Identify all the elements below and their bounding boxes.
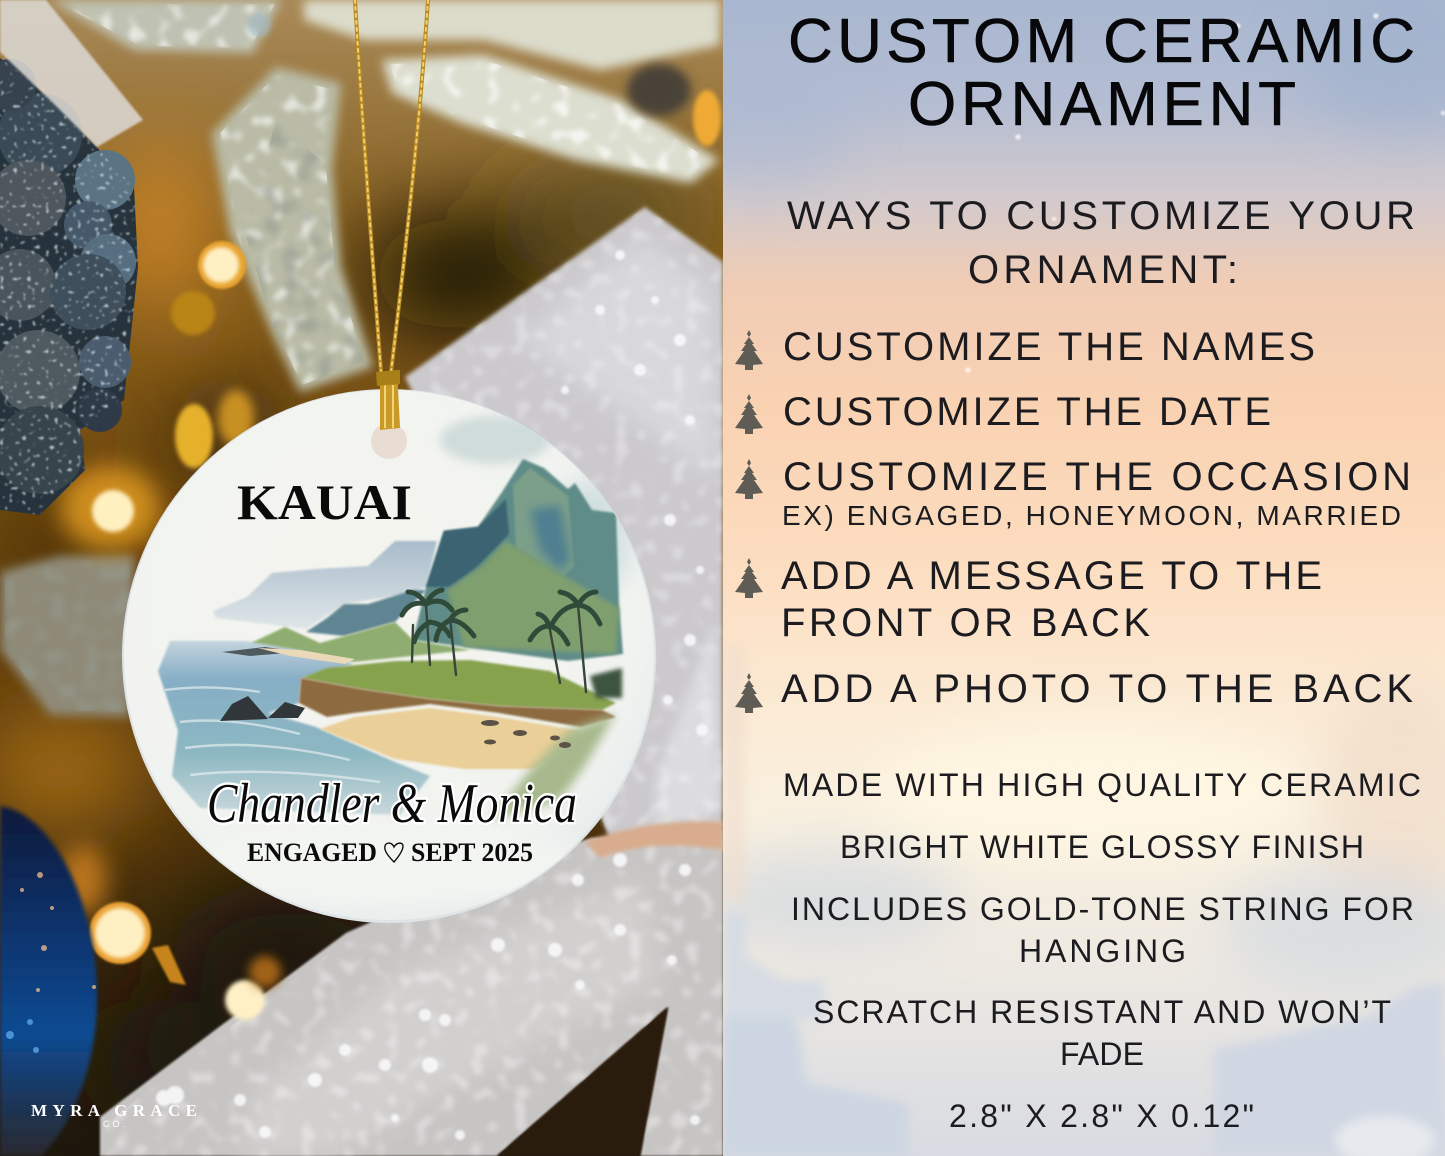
product specs [783, 767, 1421, 1134]
glitter bauble cluster [0, 58, 138, 515]
subheading [787, 201, 1414, 284]
subheading: ORNAMENT: [968, 248, 1238, 292]
gold knot [376, 370, 400, 430]
dark blue glitter bauble [0, 806, 97, 1156]
place name: KAUAI [237, 474, 412, 530]
item: message [735, 558, 1320, 636]
item: occasion: CUSTOMIZE THE OCCASION [783, 455, 1411, 499]
item: occasion: EX) ENGAGED, HONEYMOON, MARRIED [782, 500, 1401, 531]
palm trees [402, 590, 600, 692]
product specs: BRIGHT WHITE GLOSSY FINISH [840, 829, 1364, 865]
product specs: INCLUDES GOLD-TONE STRING FOR [791, 891, 1414, 927]
product specs: SCRATCH RESISTANT AND WON’T [813, 994, 1391, 1030]
product specs: FADE [1060, 1036, 1144, 1072]
panel: product photo [0, 0, 723, 1156]
item: message: ADD A MESSAGE TO THE [781, 554, 1322, 598]
background blur: warm bokeh and dark foliage [0, 140, 700, 1120]
fade behind names [204, 846, 574, 901]
title: CUSTOM CERAMIC [788, 7, 1415, 76]
scattered beach stones [481, 720, 571, 748]
bokeh lights [59, 90, 721, 1020]
product specs: MADE WITH HIGH QUALITY CERAMIC [783, 767, 1421, 803]
item: names: CUSTOMIZE THE NAMES [783, 325, 1315, 369]
subheading: WAYS TO CUSTOMIZE YOUR [787, 194, 1415, 238]
panel: product details [670, 0, 1445, 1156]
item: photo: ADD A PHOTO TO THE BACK [781, 667, 1413, 711]
snow specks [966, 14, 1445, 372]
occasion line: ENGAGED [247, 838, 377, 867]
soft colour haze [723, 36, 1445, 992]
watermark: CO. [103, 1119, 125, 1129]
product specs: HANGING [1019, 933, 1186, 969]
title: ORNAMENT [908, 70, 1296, 139]
peach ribbon edge [585, 821, 723, 858]
title [790, 18, 1413, 126]
item: date: CUSTOMIZE THE DATE [783, 390, 1271, 434]
occasion line: SEPT 2025 [411, 838, 533, 867]
watercolor scene [158, 416, 630, 902]
item: occasion [735, 455, 1411, 531]
sheer ribbon [0, 0, 143, 147]
ornament [122, 370, 656, 923]
watermark [31, 1105, 196, 1127]
product specs: 2.8" X 2.8" X 0.12" [949, 1098, 1254, 1134]
gold string [355, 0, 428, 372]
item: message: FRONT OR BACK [781, 601, 1150, 645]
watermark: MYRA GRACE [31, 1101, 197, 1120]
frosted pine branches [0, 0, 720, 717]
faint city skyline [723, 645, 1445, 1156]
customization list [735, 325, 1413, 713]
glitter sparkles [156, 250, 708, 1140]
hanging hole [371, 423, 407, 459]
occasion line [247, 842, 532, 863]
white glitter gift wrap [100, 207, 723, 1156]
names: Chandler & Monica [207, 773, 577, 835]
